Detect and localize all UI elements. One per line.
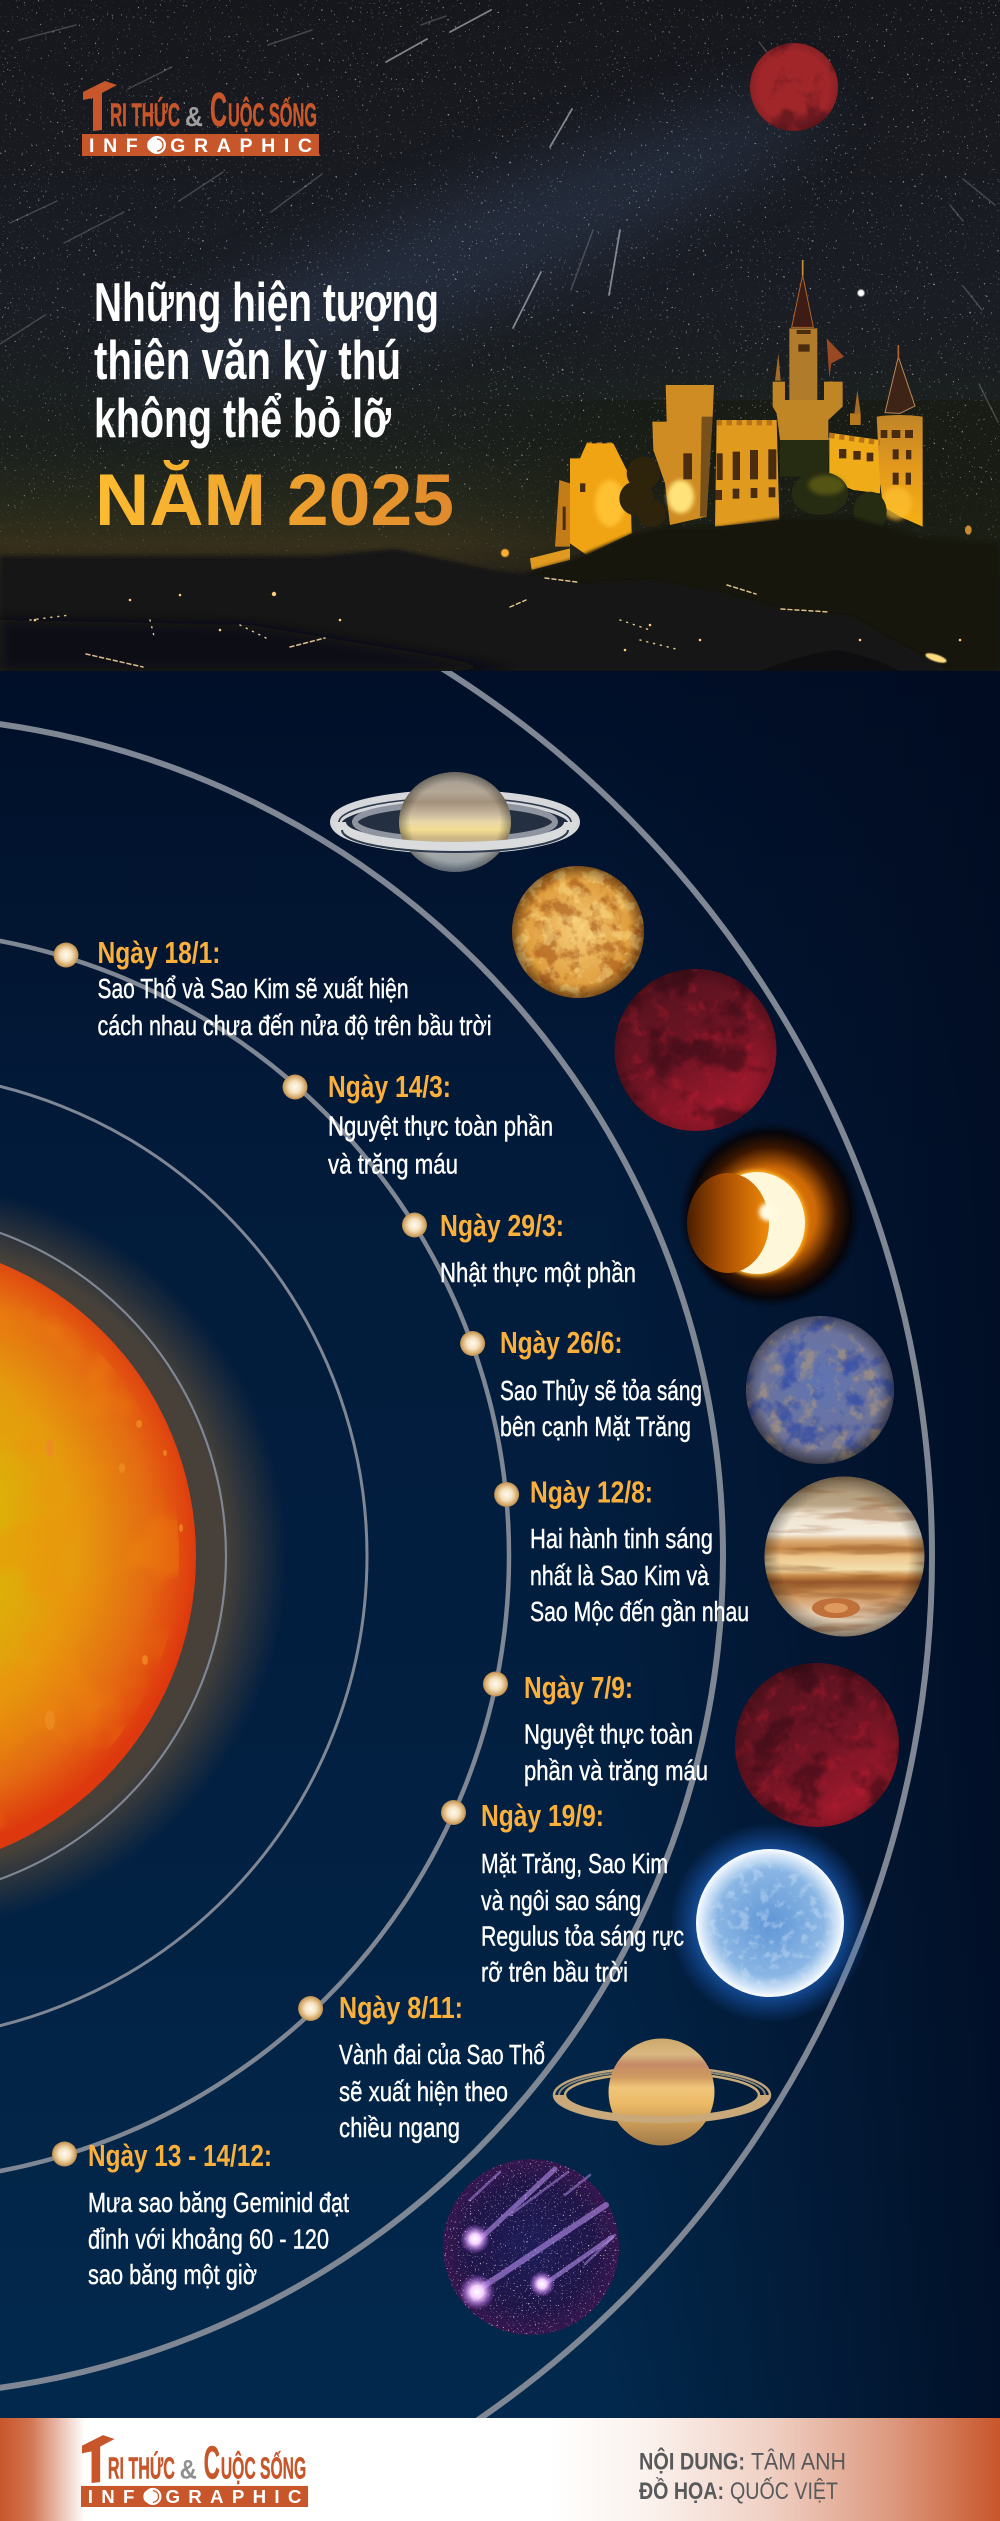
event: 8/11: sẽ xuất hiện theo [339, 2076, 508, 2107]
footer logo: C [204, 2436, 220, 2488]
footer logo: & [180, 2454, 197, 2484]
event: 19/9: rỡ trên bầu trời [481, 1956, 628, 1988]
planet: meteor shower sphere [443, 2159, 619, 2335]
title: Những hiện tượng [94, 271, 439, 333]
planet: blood moon September [735, 1663, 899, 1827]
planet: blood moon March [614, 969, 776, 1131]
event: 19/9: và ngôi sao sáng [481, 1885, 641, 1916]
logo: Tri Thức & Cuộc Sống Infographic: C [210, 84, 227, 137]
logo: Tri Thức & Cuộc Sống Infographic: & [185, 101, 203, 132]
event: 19/9 [481, 1798, 684, 1988]
orbit markers [52, 942, 519, 2166]
orbits [0, 671, 935, 2418]
event: 13-14/12: Ngày 13 - 14/12: [88, 2138, 272, 2173]
event: 26/6 [500, 1325, 702, 1442]
title: không thể bỏ lỡ [94, 387, 392, 449]
event: 13-14/12: sao băng một giờ [88, 2259, 257, 2290]
event: 13-14/12 [88, 2138, 349, 2290]
title: thiên văn kỳ thú [94, 329, 401, 391]
credits [639, 2448, 846, 2505]
event: 14/3: Nguyệt thực toàn phần [328, 1110, 553, 1142]
event: 29/3: Ngày 29/3: [440, 1208, 564, 1243]
planet: Venus [512, 866, 644, 998]
event: 18/1: Sao Thổ và Sao Kim sẽ xuất hiện [98, 973, 408, 1004]
footer logo: INFOGRAPHIC [88, 2486, 301, 2507]
footer logo [81, 2435, 308, 2507]
event: 12/8: Ngày 12/8: [530, 1474, 653, 1510]
event: 7/9: Ngày 7/9: [524, 1670, 633, 1705]
year heading: NĂM 2025 [95, 460, 454, 541]
icon: partial solar eclipse [678, 1121, 862, 1310]
event: 26/6: Sao Thủy sẽ tỏa sáng [500, 1375, 702, 1406]
footer logo: RI THỨC [108, 2449, 175, 2485]
credits: ĐỒ HỌA: [639, 2477, 724, 2505]
event: 8/11 [339, 1990, 545, 2143]
planet: blue star Regulus [670, 1823, 870, 2023]
header photo: night sky with castle [0, 0, 1000, 671]
event: 7/9 [524, 1670, 708, 1786]
event: 8/11: chiều ngang [339, 2112, 460, 2143]
event: 29/3 [440, 1208, 636, 1288]
event: 12/8: Hai hành tinh sáng [530, 1523, 713, 1554]
event: 12/8 [530, 1474, 749, 1627]
credits: NỘI DUNG: [639, 2448, 745, 2476]
event: 19/9: Regulus tỏa sáng rực [481, 1920, 684, 1952]
logo: Tri Thức & Cuộc Sống Infographic [82, 81, 319, 157]
event: 13-14/12: đỉnh với khoảng 60 - 120 [88, 2224, 329, 2254]
footer band [0, 2418, 1000, 2521]
event: 12/8: Sao Mộc đến gần nhau [530, 1596, 749, 1627]
logo: Tri Thức & Cuộc Sống Infographic: INFOGRAPHIC [89, 135, 312, 157]
event: 26/6: bên cạnh Mặt Trăng [500, 1411, 691, 1442]
planet: Saturn with horizontal rings [554, 2038, 770, 2146]
event: 7/9: Nguyệt thực toàn [524, 1718, 693, 1750]
planet: Jupiter [764, 1476, 924, 1636]
event: 29/3: Nhật thực một phần [440, 1257, 636, 1288]
logo: Tri Thức & Cuộc Sống Infographic: RI THỨC [110, 97, 180, 133]
event: 26/6: Ngày 26/6: [500, 1325, 622, 1360]
credits: TÂM ANH [751, 2448, 846, 2476]
icon: red moon in header [750, 43, 838, 131]
illustration: castle on the hill [530, 260, 972, 570]
credits: QUỐC VIỆT [730, 2477, 838, 2505]
event: 18/1: Ngày 18/1: [98, 935, 220, 970]
event: 13-14/12: Mưa sao băng Geminid đạt [88, 2187, 349, 2218]
event: 8/11: Ngày 8/11: [339, 1990, 463, 2025]
event: 19/9: Mặt Trăng, Sao Kim [481, 1848, 668, 1879]
hills and town lights [0, 517, 1000, 671]
event: 14/3: và trăng máu [328, 1148, 458, 1180]
event: 7/9: phần và trăng máu [524, 1755, 708, 1786]
event: 8/11: Vành đai của Sao Thổ [339, 2039, 545, 2070]
event: 12/8: nhất là Sao Kim và [530, 1560, 710, 1591]
footer logo: UỘC SỐNG [221, 2449, 306, 2485]
sun with glow [0, 1184, 287, 1928]
event: 18/1: cách nhau chưa đến nửa độ trên bầu trời [98, 1010, 492, 1041]
meteors [0, 10, 998, 422]
planet: Mercury [746, 1316, 894, 1464]
event: 14/3: Ngày 14/3: [328, 1069, 451, 1104]
event: 18/1 [98, 935, 492, 1041]
bright star [858, 290, 864, 296]
logo: Tri Thức & Cuộc Sống Infographic: UỘC SỐNG [228, 97, 317, 133]
panel: solar system background [0, 671, 1000, 2418]
planet: Saturn with rings [333, 772, 577, 872]
event: 14/3 [328, 1069, 553, 1180]
event: 19/9: Ngày 19/9: [481, 1798, 604, 1833]
title [94, 271, 454, 541]
